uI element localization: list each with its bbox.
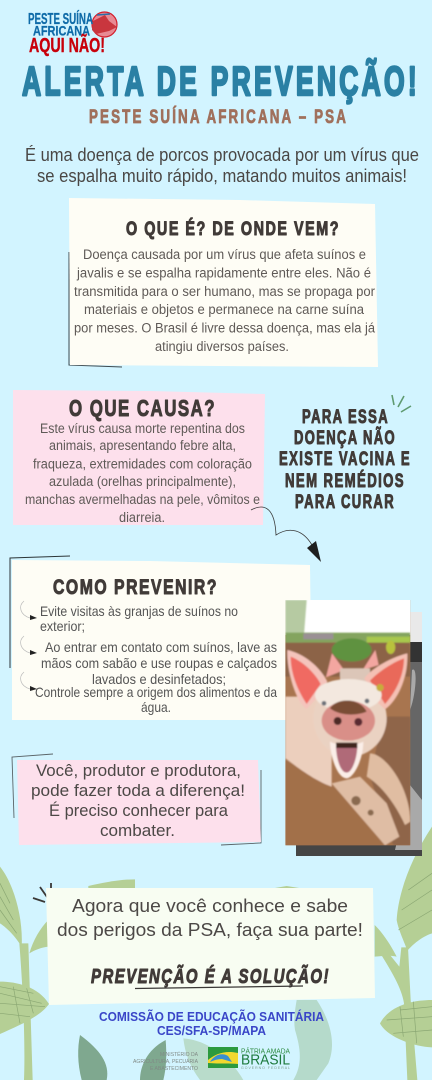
panel: o que causa: [13, 390, 265, 525]
body text: o que causa: azulada (orelhas principalmente),: [49, 474, 236, 489]
panel: faça sua parte: [46, 888, 375, 1005]
heading: prevenção é a solução: PREVENÇÃO É A SOLUÇÃO!: [91, 965, 330, 988]
body text: o que causa: animais, apresentando febre alta,: [49, 438, 236, 453]
heading: como prevenir: COMO PREVENIR?: [53, 576, 218, 599]
panel: o que é: [69, 198, 378, 367]
body text: o que é: atingiu diversos países.: [155, 339, 289, 354]
body text: o que causa: Este vírus causa morte repentina dos: [40, 421, 245, 436]
body text: o que é: javalis e se espalha rapidamente entre eles. Não é: [76, 266, 371, 280]
logo: pátria amada brasil: PÁTRIA AMADA: [241, 1046, 290, 1056]
arrow: curved to prevention: [251, 507, 321, 562]
prevention list: lavados e desinfetados;: [92, 671, 226, 687]
logo: Peste Suína Africana Aqui Não: AQUI NÃO!: [29, 34, 105, 57]
photo: grayscale pig behind: [296, 612, 422, 856]
callout: sem vacina: PARA ESSA: [302, 407, 389, 428]
logo: pátria amada brasil: [208, 1046, 290, 1070]
text: produtor: pode fazer toda a diferença!: [31, 781, 245, 800]
footer: comissão: COMISSÃO DE EDUCAÇÃO SANITÁRIA: [99, 1009, 325, 1024]
text: faça sua parte: dos perigos da PSA, faça sua parte!: [57, 920, 363, 940]
illustration: background leaves: [0, 826, 432, 1080]
logo: Peste Suína Africana Aqui Não: AFRICANA: [33, 22, 90, 38]
text: faça sua parte: Agora que você conhece e sabe: [72, 896, 348, 916]
prevention list: Evite visitas às granjas de suínos no: [40, 603, 238, 619]
prevention list: mãos com sabão e use roupas e calçados: [41, 655, 277, 671]
callout: sem vacina: [279, 395, 411, 513]
body text: o que é: transmitida para o ser humano, mas se propaga por: [74, 284, 375, 299]
logo: pátria amada brasil: BRASIL: [241, 1052, 290, 1068]
icon: flag: [208, 1047, 238, 1068]
body text: o que é: por meses. O Brasil é livre dessa doença, mas ela já: [74, 320, 375, 336]
heading: o que causa: O QUE CAUSA?: [69, 395, 216, 421]
panel: produtor: [12, 754, 261, 845]
logo: pátria amada brasil: GOVERNO FEDERAL: [241, 1066, 290, 1070]
intro text: [25, 145, 419, 186]
footer: comissão: CES/SFA-SP/MAPA: [157, 1023, 267, 1038]
underline: [135, 986, 303, 988]
text: produtor: Você, produtor e produtora,: [36, 761, 241, 780]
text: produtor: combater.: [100, 821, 175, 840]
prevention list: [35, 603, 277, 715]
body text: o que é: [74, 247, 375, 354]
body text: o que é: Doença causada por um vírus que afeta suínos e: [83, 247, 366, 262]
icon: green sparks: [392, 395, 411, 412]
body text: o que causa: fraqueza, extremidades com coloração: [33, 456, 252, 472]
text: produtor: [31, 761, 245, 840]
body text: o que causa: diarreia.: [119, 510, 165, 525]
logo: ministério: E ABASTECIMENTO: [150, 1066, 199, 1072]
list arrows: [21, 601, 37, 691]
icon: pig in a prohibition circle: [92, 12, 117, 37]
logo: ministério: AGRICULTURA, PECUÁRIA: [133, 1058, 198, 1065]
logo: Peste Suína Africana Aqui Não: [28, 11, 117, 57]
panel: como prevenir: [10, 556, 312, 720]
logo: ministério: [133, 1051, 199, 1072]
body text: o que é: materiais e objetos e permanece na carne suína: [84, 302, 364, 317]
body text: o que causa: [25, 421, 260, 525]
body text: o que causa: manchas avermelhadas na pele, vômitos e: [25, 492, 260, 507]
prevention list: Ao entrar em contato com suínos, lave as: [45, 639, 277, 655]
intro text: se espalha muito rápido, matando muitos animais!: [37, 166, 407, 186]
text: produtor: É preciso conhecer para: [49, 801, 229, 820]
prevention list: água.: [141, 699, 171, 715]
text: faça sua parte: [57, 896, 363, 940]
logo: Peste Suína Africana Aqui Não: PESTE SUÍNA: [28, 11, 93, 28]
prevention list: Controle sempre a origem dos alimentos e da: [35, 684, 277, 700]
heading: o que é: O QUE É? DE ONDE VEM?: [126, 218, 340, 240]
icon: dark sparks: [33, 883, 51, 902]
prevention list: exterior;: [40, 618, 85, 634]
logo: ministério: MINISTÉRIO DA: [160, 1051, 198, 1058]
photo: pig: [285, 600, 410, 846]
footer: comissão: [99, 1009, 325, 1038]
